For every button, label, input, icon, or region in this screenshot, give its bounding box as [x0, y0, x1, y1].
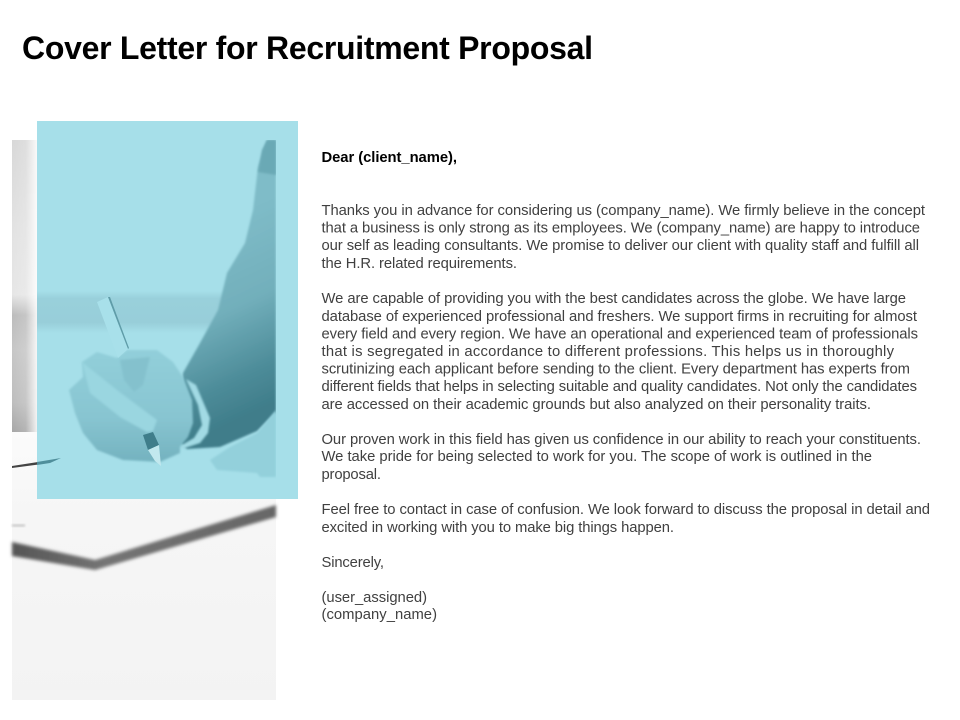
letter text — [322, 150, 930, 623]
paragraph 1: that a business is only strong as its employees. We (company_name) are happy to introduce — [322, 220, 920, 236]
paragraph 3: proposal. — [322, 467, 381, 483]
paragraph 3 — [322, 432, 921, 483]
writing hand — [69, 350, 193, 462]
paragraph 1: the H.R. related requirements. — [322, 256, 517, 272]
thumb shadow — [121, 358, 149, 388]
paragraph 2: every field and every region. We have an operational and experienced team of professionals — [322, 326, 918, 342]
paragraph 1: Thanks you in advance for considering us (company_name). We firmly believe in the concept — [322, 203, 925, 219]
sleeve shoulder shade — [258, 140, 276, 175]
jacket sleeve — [178, 140, 276, 449]
paragraph 3: We take pride for being selected to work for you. The scope of work is outlined in the — [322, 449, 872, 465]
paragraph 1 — [322, 203, 925, 272]
teal overlay photo panel — [37, 121, 298, 499]
desk pen shadow — [37, 458, 61, 465]
paragraph 4: Feel free to contact in case of confusion. We look forward to discuss the proposal in detail and — [322, 502, 930, 518]
paragraph 3: Our proven work in this field has given us confidence in our ability to reach your constituents. — [322, 432, 921, 448]
pen tip — [143, 432, 159, 450]
paragraph 2: database of experienced professional and freshers. We support firms in recruiting for almost — [322, 309, 917, 325]
shirt cuff — [180, 379, 210, 449]
blurred background band — [37, 295, 220, 328]
title: Cover Letter for Recruitment Proposal — [22, 30, 593, 66]
index finger highlight — [82, 362, 157, 432]
paragraph 2: are accessed on their academic grounds but also analyzed on their personality traits. — [322, 397, 871, 413]
paragraph 4 — [322, 502, 930, 536]
pen nib — [148, 445, 161, 466]
other hand — [210, 410, 276, 477]
paragraph 4: excited in working with you to make big things happen. — [322, 520, 674, 536]
paragraph 2: that is segregated in accordance to different professions. This helps us in thoroughly — [322, 344, 895, 360]
paragraph 2: different fields that helps in selecting suitable and quality candidates. Not only the candidates — [322, 379, 917, 395]
photo: grey desk with clipboard — [12, 140, 276, 700]
sign-off — [322, 555, 437, 623]
sign-off: (company_name) — [322, 607, 437, 623]
paragraph 1: our self as leading consultants. We promise to deliver our client with quality staff and fulfill all — [322, 238, 919, 254]
paragraph 2: We are capable of providing you with the best candidates across the globe. We have large — [322, 291, 906, 307]
paragraph 2: scrutinizing each applicant before sending to the client. Every department has experts from — [322, 362, 910, 378]
sign-off: (user_assigned) — [322, 590, 427, 606]
pen barrel edge — [108, 297, 129, 349]
paragraph 2 — [322, 291, 918, 413]
pen barrel — [97, 297, 128, 358]
sign-off: Sincerely, — [322, 555, 384, 571]
salutation: Dear (client_name), — [322, 150, 457, 166]
